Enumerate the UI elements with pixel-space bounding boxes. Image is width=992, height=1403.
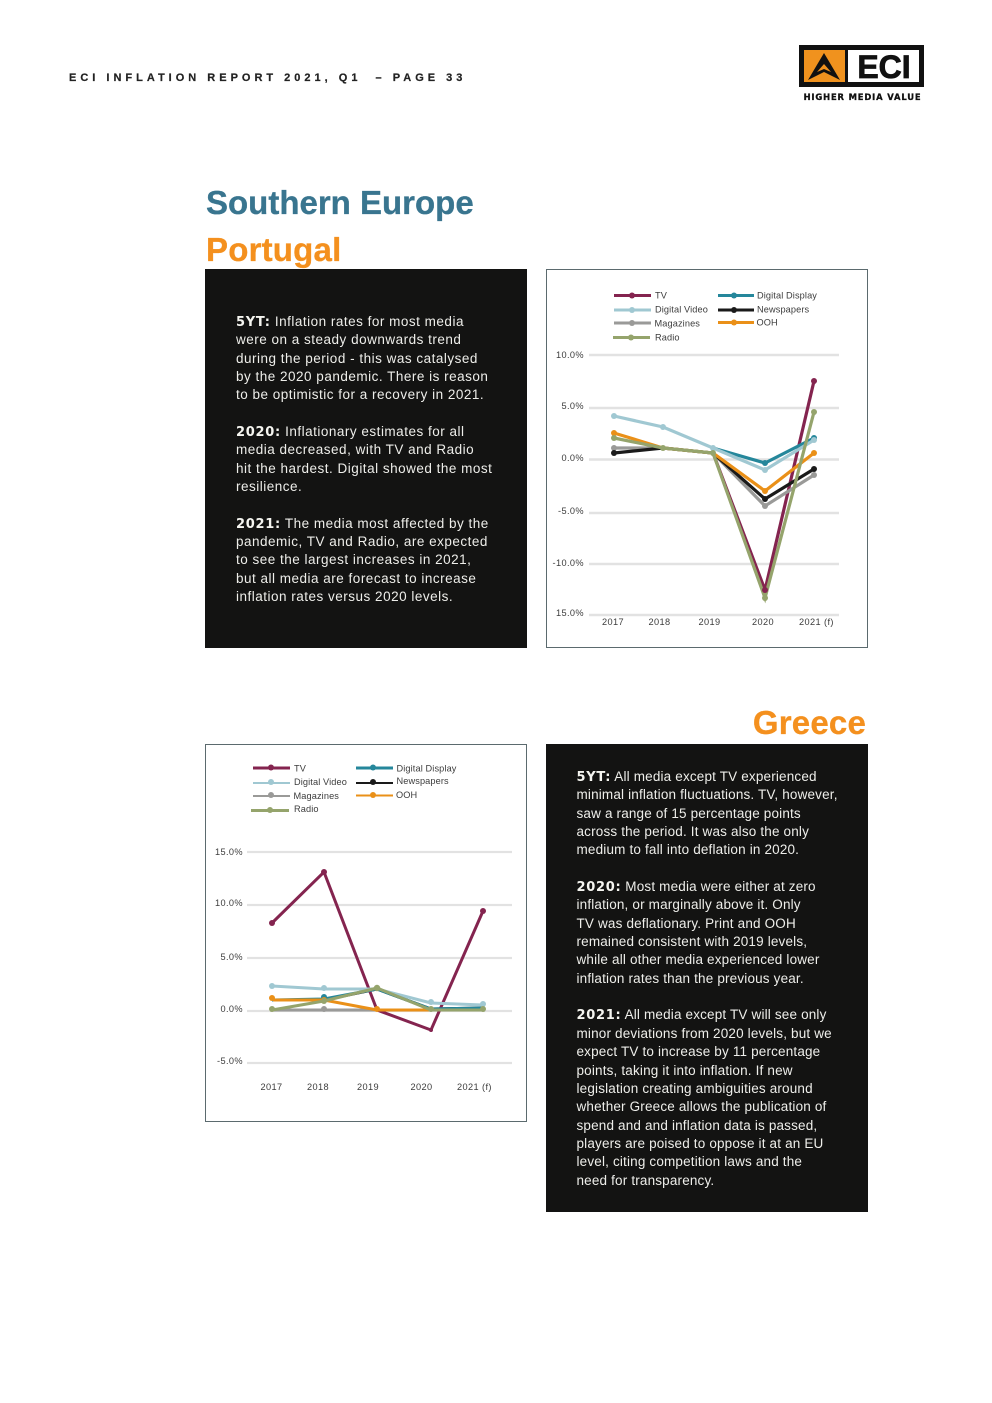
y axis labels: 0.0%	[561, 453, 584, 463]
text: Greece commentary copy: need for transparency.	[576, 1173, 714, 1188]
legend: Newspapers	[757, 304, 810, 314]
text: Greece commentary copy: 2020: Most media were either at zero	[576, 879, 816, 895]
text: Greece commentary copy: inflation, or marginally above it. Only	[576, 897, 801, 912]
text: Greece commentary copy: while all other media experienced lower	[576, 952, 820, 967]
text: Portugal commentary copy: 2021: The media most affected by the	[236, 516, 489, 532]
legend: Magazines	[294, 791, 339, 801]
chart: Greece inflation by medium	[205, 744, 527, 1122]
legend: Radio	[294, 804, 319, 814]
text: Portugal commentary copy: pandemic, TV and Radio, are expected	[236, 534, 488, 549]
logo: ECI: HIGHER MEDIA VALUE	[804, 92, 921, 102]
text: Greece commentary copy: whether Greece allows the publication of	[576, 1099, 826, 1114]
text: Greece commentary copy: 5YT: All media except TV experienced	[576, 769, 817, 785]
text: Portugal commentary copy: by the 2020 pandemic. There is reason	[236, 369, 488, 384]
text: Greece commentary copy: 2021: All media except TV will see only	[576, 1007, 827, 1023]
legend: Newspapers	[396, 776, 449, 786]
legend	[251, 764, 457, 814]
y axis labels: 5.0%	[561, 401, 584, 411]
legend: OOH	[396, 790, 417, 800]
logo: ECI: ECI	[857, 49, 911, 85]
legend: TV	[294, 764, 307, 774]
y axis labels: -5.0%	[217, 1056, 243, 1066]
text: Greece commentary copy: level, citing competition laws and the	[576, 1154, 802, 1169]
text: Greece commentary copy: minor deviations from 2020 levels, but we	[576, 1026, 832, 1041]
y axis labels: 15.0%	[215, 847, 243, 857]
text: Greece commentary copy: medium to fall into deflation in 2020.	[576, 842, 799, 857]
y axis labels: -10.0%	[552, 558, 584, 568]
y axis labels: 5.0%	[220, 952, 243, 962]
text: Greece commentary copy: minimal inflation fluctuations. TV, however,	[576, 787, 838, 802]
y axis labels: 15.0%	[556, 608, 584, 618]
x axis labels: 2021 (f)	[457, 1082, 492, 1092]
y axis labels: 10.0%	[215, 898, 243, 908]
x axis labels: 2020	[752, 617, 774, 627]
text: Greece commentary copy: spend and and inflation data is passed,	[576, 1118, 817, 1133]
chart: Portugal inflation by medium	[546, 269, 868, 648]
y axis labels: -5.0%	[558, 506, 584, 516]
text: Portugal commentary copy	[236, 314, 492, 604]
text: Portugal commentary copy: to see the largest increases in 2021,	[236, 552, 471, 567]
x axis labels: 2017	[602, 617, 624, 627]
text: Portugal commentary copy: resilience.	[236, 479, 302, 494]
legend: OOH	[756, 318, 778, 328]
logo: ECI	[799, 45, 924, 102]
x axis labels: 2019	[698, 617, 721, 627]
text: Portugal commentary copy: media decreased, with TV and Radio	[236, 442, 474, 457]
y axis labels: 10.0%	[556, 350, 584, 360]
y axis labels: 0.0%	[220, 1004, 243, 1014]
heading: Southern Europe: Southern Europe	[206, 184, 474, 221]
x axis labels: 2021 (f)	[799, 617, 834, 627]
heading: Portugal: Portugal	[206, 231, 341, 268]
data lines	[272, 872, 483, 1030]
legend: Radio	[655, 332, 680, 342]
text: Portugal commentary copy: inflation rates versus 2020 levels.	[236, 589, 453, 604]
text: Greece commentary copy: across the period. It was also the only	[576, 824, 809, 839]
panel: Greece commentary	[546, 744, 868, 1212]
text: Greece commentary copy: TV was deflationary. Print and OOH	[576, 916, 796, 931]
text: Greece commentary copy: saw a range of 15 percentage points	[576, 806, 801, 821]
x axis labels: 2017	[260, 1082, 283, 1092]
y axis labels	[552, 350, 584, 618]
text: Portugal commentary copy: 2020: Inflationary estimates for all	[236, 424, 464, 440]
x axis labels	[602, 617, 834, 627]
text: Greece commentary copy: expect TV to increase by 11 percentage	[576, 1044, 820, 1059]
text: Portugal commentary copy: but all media are forecast to increase	[236, 571, 476, 586]
heading: Greece: Greece	[753, 704, 866, 741]
text: Greece commentary copy	[576, 769, 838, 1188]
text: Greece commentary copy: legislation creating ambiguities around	[576, 1081, 813, 1096]
x axis labels: 2019	[357, 1082, 379, 1092]
legend	[613, 290, 817, 342]
text: Greece commentary copy: points, taking it into inflation. If new	[576, 1062, 793, 1078]
text: Portugal commentary copy: to be optimistic for a recovery in 2021.	[236, 387, 484, 402]
x axis labels: 2018	[307, 1082, 329, 1092]
x axis labels	[260, 1082, 492, 1092]
legend: Digital Display	[757, 290, 817, 300]
text: Greece commentary copy: remained consistent with 2019 levels,	[576, 934, 807, 949]
legend: TV	[655, 290, 668, 300]
x axis labels: 2020	[410, 1082, 433, 1092]
text: Portugal commentary copy: were on a steady downwards trend	[236, 332, 461, 347]
x axis labels: 2018	[648, 617, 671, 627]
legend: Digital Display	[396, 764, 457, 774]
legend: Magazines	[654, 318, 700, 328]
running header: ECI INFLATION REPORT 2021, Q1 – PAGE 33	[69, 72, 466, 84]
text: Greece commentary copy: players are poised to oppose it at an EU	[576, 1136, 823, 1151]
text: Portugal commentary copy: hit the hardest. Digital showed the most	[236, 461, 492, 476]
text: Portugal commentary copy: 5YT: Inflation rates for most media	[236, 314, 464, 330]
legend: Digital Video	[294, 777, 347, 787]
y axis labels	[215, 847, 243, 1066]
panel: Portugal commentary	[205, 269, 527, 648]
text: Greece commentary copy: inflation rates than the previous year.	[576, 971, 804, 986]
data lines	[614, 381, 814, 598]
text: Portugal commentary copy: during the period - this was catalysed	[236, 351, 478, 366]
legend: Digital Video	[655, 304, 708, 314]
